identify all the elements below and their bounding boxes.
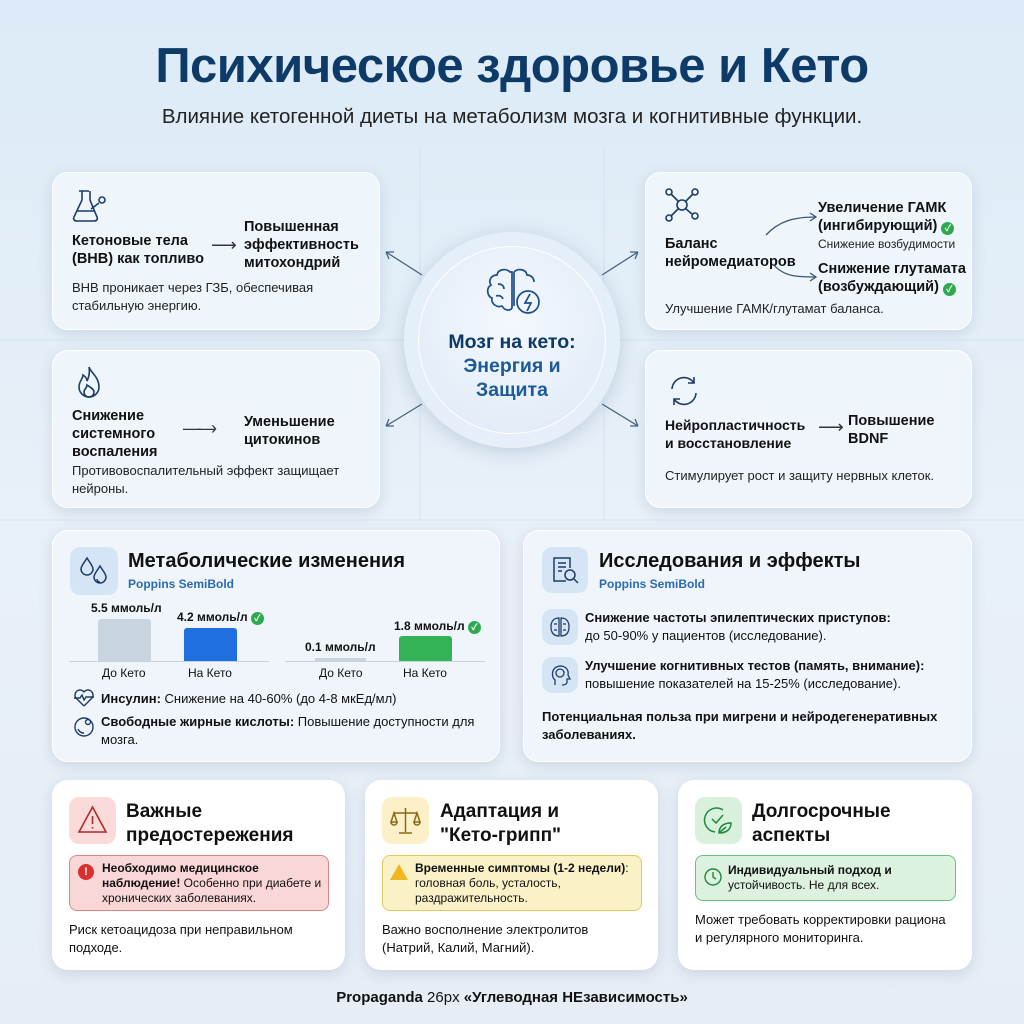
text: fatty acids: Свободные жирные кислоты: Повышение доступности для мозга. [101, 714, 474, 747]
subheading: Poppins SemiBold [128, 577, 234, 591]
icon: drops [70, 547, 118, 595]
text: GABA: Увеличение ГАМК (ингибирующий) [818, 200, 946, 234]
text: cytokines: Уменьшение цитокинов [244, 414, 335, 448]
text: insulin: Инсулин: Снижение на 40-60% (до 4-8 мкЕд/мл) [101, 691, 397, 706]
bar chart: ketones: 0.1 ммоль/л [305, 640, 376, 654]
heading [752, 801, 891, 846]
panel: ketone bodies [52, 172, 380, 330]
text: neuroplasticity title: Нейропластичность и восстановление [665, 417, 805, 451]
text: center title: Энергия и [463, 355, 561, 377]
text: center title [448, 331, 576, 401]
item: epilepsy: до 50-90% у пациентов (исследование). [585, 628, 826, 643]
heading [126, 801, 293, 846]
subheading: Poppins SemiBold [599, 577, 705, 591]
text: body: Противовоспалительный эффект защищает нейроны. [72, 463, 339, 496]
footer: Propaganda 26px «Углеводная НЕзависимость» [336, 989, 688, 1006]
text: inflammation title: Снижение системного воспаления [72, 408, 158, 460]
icon: brain with bolt [486, 268, 540, 314]
icon: leaf check [695, 797, 742, 844]
text: monitoring: Может требовать корректировки рациона и регулярного мониторинга. [695, 912, 946, 945]
text: potential: Потенциальная польза при мигрени и нейродегенеративных заболеваниях. [542, 709, 937, 742]
panel: inflammation [52, 350, 380, 508]
panel: metabolic changes [52, 530, 500, 762]
icon: molecule [665, 188, 699, 222]
arrow: ——› [183, 418, 213, 438]
bar chart: glucose: ✓ [254, 613, 261, 623]
panel: adaptation [365, 780, 658, 970]
heading: Важные [126, 801, 202, 822]
text: glutamate: ✓ [946, 284, 953, 294]
bar chart: ketones [285, 619, 485, 680]
icon: flask [72, 190, 106, 222]
bar chart: ketones: До Кето [319, 666, 363, 680]
heading: Долгосрочные [752, 801, 891, 822]
icon: flame [78, 366, 100, 398]
text: body: Стимулирует рост и защиту нервных клеток. [665, 468, 934, 483]
item: cognition [542, 657, 924, 693]
arrow: ⟶ [818, 417, 844, 437]
text: center title: Мозг на кето: [448, 331, 576, 353]
text: mitochondria: Повышенная эффективность митохондрий [244, 219, 359, 271]
heading: аспекты [752, 825, 830, 846]
panel: research [523, 530, 972, 762]
center circle [404, 232, 620, 448]
arrow: ⟶ [211, 235, 237, 255]
panel: warnings [52, 780, 345, 970]
text: ketone title: Кетоновые тела (BHB) как топливо [72, 233, 204, 267]
callout: medical: Необходимо медицинское наблюдение! Особенно при диабете и хронических заболеваниях. [102, 861, 321, 905]
heading: Адаптация и [440, 801, 559, 822]
panel: neurotransmitters [645, 172, 972, 330]
callout: medical [69, 855, 329, 911]
icon: warning [69, 797, 116, 844]
callout: symptoms: Временные симптомы (1-2 недели): головная боль, усталость, раздражительность. [415, 861, 629, 905]
text: center title: Защита [476, 379, 548, 401]
bar chart: glucose: До Кето [102, 666, 146, 680]
item: cognition: Улучшение когнитивных тестов (память, внимание): [585, 658, 924, 673]
subtitle: Влияние кетогенной диеты на метаболизм мозга и когнитивные функции. [162, 105, 862, 128]
text: body: Улучшение ГАМК/глутамат баланса. [665, 301, 884, 316]
text: body: BHB проникает через ГЗБ, обеспечивая стабильную энергию. [72, 280, 313, 313]
callout: medical: ! [84, 866, 88, 878]
arrows: curved [766, 212, 817, 282]
bar chart: ketones: 1.8 ммоль/л [394, 619, 465, 633]
item: epilepsy [542, 609, 891, 645]
bar chart: glucose [69, 601, 269, 680]
icon: document search [542, 547, 588, 593]
callout: individual: Индивидуальный подход и устойчивость. Не для всех. [728, 863, 892, 892]
text: glutamate: Снижение глутамата (возбуждающий) [818, 261, 966, 295]
icon: scales [382, 797, 429, 844]
heading: "Кето-грипп" [440, 825, 561, 846]
text: GABA [818, 200, 955, 251]
bar chart: glucose: 5.5 ммоль/л [91, 601, 162, 615]
heading: Исследования и эффекты [599, 550, 860, 572]
text: GABA: Снижение возбудимости [818, 237, 955, 251]
text: GABA: ✓ [945, 223, 951, 233]
bar chart: glucose: 4.2 ммоль/л [177, 610, 248, 624]
callout: individual [695, 855, 956, 901]
panel: long-term [678, 780, 972, 970]
heading [440, 801, 561, 846]
text: electrolytes: Важно восполнение электролитов (Натрий, Калий, Магний). [382, 922, 588, 955]
bar chart: ketones: На Кето [403, 666, 447, 680]
text: risk: Риск кетоацидоза при неправильном подходе. [69, 922, 293, 955]
text: BDNF: Повышение BDNF [848, 413, 934, 447]
callout: symptoms [382, 855, 642, 911]
bar chart: ketones: ✓ [471, 622, 478, 632]
item: epilepsy: Снижение частоты эпилептических приступов: [585, 610, 891, 625]
item: cognition: повышение показателей на 15-25% (исследование). [585, 676, 901, 691]
icon: refresh [671, 376, 697, 406]
heading: Метаболические изменения [128, 550, 405, 572]
heading: предостережения [126, 825, 293, 846]
panel: neuroplasticity [645, 350, 972, 508]
text: balance title: Баланс нейромедиаторов [665, 236, 796, 270]
title: Психическое здоровье и Кето [155, 39, 869, 93]
bar chart: glucose: На Кето [188, 666, 232, 680]
